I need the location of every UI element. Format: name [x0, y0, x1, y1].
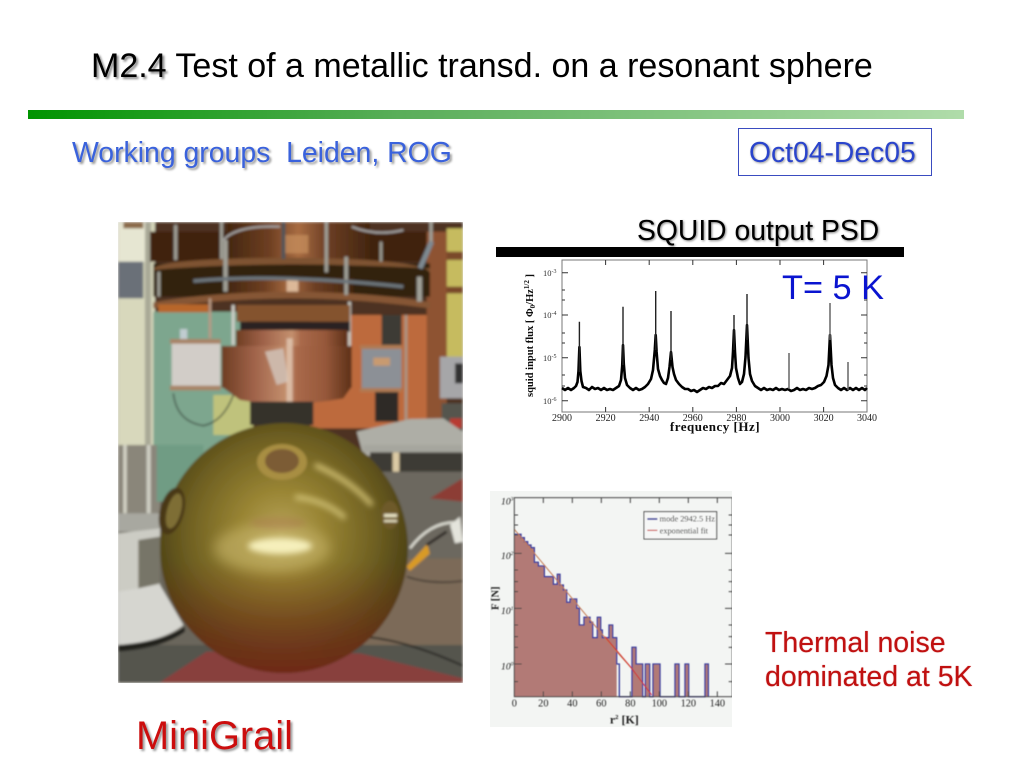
copper rings: [153, 258, 430, 273]
y axis title: ]: [525, 274, 536, 280]
x tick labels: 0: [512, 699, 517, 710]
x tick labels: 3020: [814, 413, 834, 424]
cables and clamp: [410, 522, 457, 548]
histogram outline: [514, 534, 708, 697]
spectrum trace: [562, 325, 867, 392]
date text: Oct04-Dec05: [749, 136, 916, 168]
title: M2.4 Test of a metallic transd. on a resonant sphere: [91, 47, 873, 85]
x tick labels: 2940: [639, 413, 659, 424]
neck and can: [237, 305, 350, 322]
x tick labels: 2900: [552, 413, 572, 424]
top flange: [257, 444, 307, 480]
upper scene in zoom coordinates: [118, 222, 463, 456]
x tick labels: [512, 699, 725, 710]
y tick labels: 10: [501, 662, 511, 673]
right flange: [381, 501, 399, 529]
x axis title: frequency [Hz]: [670, 419, 760, 434]
x tick labels: 3040: [857, 413, 877, 424]
y tick labels: 10: [543, 310, 552, 320]
left flange: [154, 485, 190, 537]
temperature label: T= 5 K: [782, 269, 884, 307]
x tick labels: 60: [596, 699, 606, 710]
y tick labels: 10: [543, 268, 552, 278]
aluminium box: [172, 342, 220, 389]
y axis title: 0: [529, 304, 537, 308]
x axis title: r: [610, 713, 615, 727]
chart: SQUID power spectral density: [523, 260, 877, 434]
chart: histogram with exponential fit: [490, 491, 732, 727]
caption: MiniGrail: MiniGrail: [136, 714, 293, 758]
y tick labels: 3: [510, 496, 514, 502]
exponential fit line: [514, 529, 632, 668]
brass sphere: [160, 423, 408, 673]
black bar: [496, 247, 904, 257]
chart: histogram with exponential fit: exponential fit: [660, 527, 709, 536]
y axis title: F [N]: [490, 586, 501, 610]
y tick labels: 10: [501, 551, 511, 562]
sharp spectral lines: [579, 291, 747, 372]
y axis title: /Hz: [525, 289, 536, 306]
y tick labels: [501, 496, 514, 673]
chart: histogram with exponential fit: mode 2942.5 Hz: [660, 515, 715, 524]
vertical rods: [157, 222, 433, 422]
histogram fill: [514, 534, 708, 697]
right instrument: [440, 357, 463, 398]
y tick labels: 2: [511, 551, 514, 557]
y tick labels: 10: [543, 353, 552, 363]
y axis title: squid input flux [ Φ: [525, 308, 536, 397]
stool: [118, 513, 160, 532]
date box: [738, 128, 932, 176]
callout: thermal noise: Thermal noise dominated at 5K: [765, 627, 973, 693]
y tick labels: -6: [552, 397, 556, 403]
y axis title: 1/2: [523, 280, 531, 289]
y tick labels: [543, 268, 556, 406]
x tick labels: 20: [538, 699, 548, 710]
y tick labels: -4: [552, 311, 556, 317]
heading: SQUID output PSD: SQUID output PSD: [637, 214, 879, 246]
x tick labels: 40: [567, 699, 577, 710]
x tick labels: 2960: [683, 413, 703, 424]
y tick labels: 10: [501, 496, 511, 507]
x tick labels: 80: [625, 699, 635, 710]
x tick labels: 3000: [770, 413, 790, 424]
x tick labels: 140: [710, 699, 725, 710]
plot frame and ticks: [514, 498, 732, 697]
y tick labels: 1: [511, 606, 514, 612]
x axis title: 2: [615, 714, 619, 721]
lower scene in zoom coordinates: [118, 445, 463, 682]
green header divider: [28, 110, 964, 119]
y tick labels: 10: [543, 396, 552, 406]
plot frame: [562, 260, 867, 412]
photo: MiniGrail sphere and cryostat: [118, 222, 463, 683]
x tick labels: 2920: [596, 413, 616, 424]
working groups text: Working groups Leiden, ROG: [72, 137, 452, 169]
x tick labels: [552, 413, 877, 424]
y tick labels: -5: [552, 354, 556, 360]
grey cylinder: [362, 348, 402, 389]
table: [357, 418, 463, 456]
y tick labels: 10: [501, 606, 511, 617]
y tick labels: 0: [511, 662, 514, 668]
legend: [644, 512, 717, 539]
y tick labels: -3: [552, 269, 556, 275]
x tick labels: 100: [652, 699, 667, 710]
x tick labels: 120: [681, 699, 696, 710]
top copper vessel: [150, 232, 427, 262]
x axis title: [K]: [619, 713, 639, 727]
x tick labels: 2980: [726, 413, 746, 424]
